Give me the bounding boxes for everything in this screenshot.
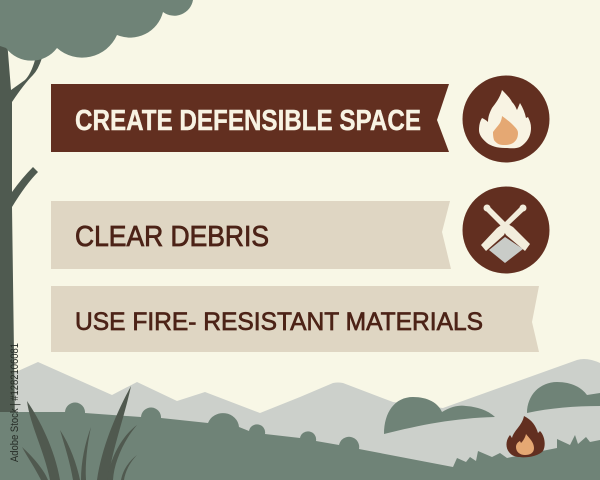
ribbon [51,286,539,352]
tool one [484,204,530,251]
small campfire flame [506,416,545,457]
icon: crossed tools badge [462,186,550,274]
label: USE FIRE- RESISTANT MATERIALS [75,308,483,336]
bush right [527,382,600,413]
flame core [493,116,518,145]
banner: clear debris [51,201,451,269]
tool two [481,204,526,251]
heading: CREATE DEFENSIBLE SPACE [75,105,421,137]
icon: flame badge [462,76,550,162]
tree canopy [0,0,193,61]
foreground hills [0,402,600,480]
flame white [479,90,531,148]
bush left [384,397,495,434]
ribbon [51,84,449,152]
debris pile [489,237,523,263]
badge circle [462,76,550,162]
distant mountains [0,359,600,480]
banner: use fire-resistant materials [51,286,539,352]
badge circle [462,186,550,274]
tree [0,0,193,427]
banner: create defensible space [51,84,449,152]
flame inner [516,434,534,455]
label: CLEAR DEBRIS [75,221,269,253]
stock credit: Adobe Stock | #1282106081 [9,343,21,462]
flame outer [506,416,545,457]
ribbon [51,201,451,269]
tree trunk and branches [0,40,42,427]
grass blades [22,386,137,480]
